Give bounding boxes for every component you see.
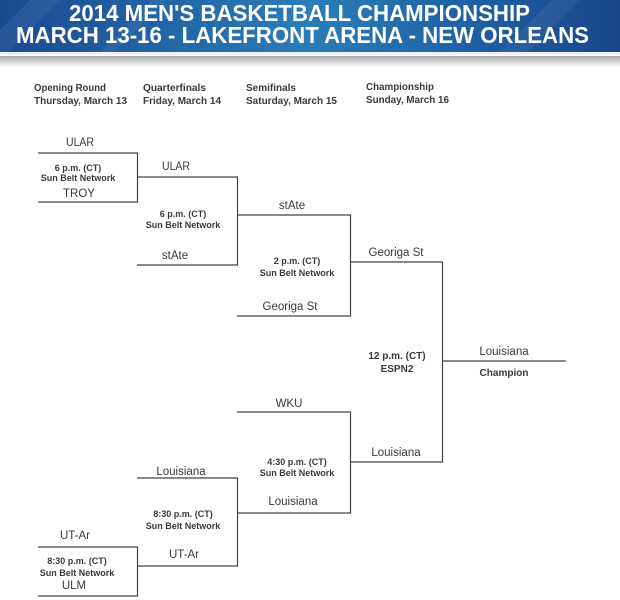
opening game 1: TROY — [63, 188, 95, 200]
title: MARCH 13-16 - LAKEFRONT ARENA - NEW ORLEANS — [16, 22, 589, 48]
semifinal 1: 2 p.m. (CT) — [274, 256, 320, 266]
opening game 1: 6 p.m. (CT) — [55, 163, 101, 173]
quarterfinal 1 — [146, 161, 221, 262]
semifinal 2 — [260, 398, 335, 508]
round headers: Quarterfinals — [143, 82, 206, 94]
opening game 2: ULM — [62, 580, 86, 592]
opening game 1: Sun Belt Network — [41, 173, 116, 183]
header banner — [0, 0, 620, 67]
semifinal 2: Louisiana — [268, 496, 318, 508]
semifinal 1: Sun Belt Network — [260, 268, 335, 278]
opening game 2 — [40, 530, 115, 592]
opening game 1: ULAR — [66, 137, 94, 149]
quarterfinal 1: 6 p.m. (CT) — [160, 209, 206, 219]
championship game: 12 p.m. (CT) — [368, 351, 426, 362]
semifinal 1: Georiga St — [263, 301, 318, 313]
title: 2014 MEN'S BASKETBALL CHAMPIONSHIP — [69, 0, 530, 26]
round headers: Thursday, March 13 — [34, 95, 127, 107]
quarterfinal 2: UT-Ar — [169, 549, 199, 561]
championship game: Georiga St — [369, 247, 424, 259]
round headers: Friday, March 14 — [143, 95, 221, 107]
champion — [479, 346, 529, 379]
round headers: Opening Round — [34, 82, 106, 94]
bracket lines — [38, 153, 566, 596]
opening game 2: Sun Belt Network — [40, 568, 115, 578]
semifinal 1: stAte — [279, 200, 305, 212]
opening game 1 — [41, 137, 116, 200]
quarterfinal 2 — [146, 466, 221, 561]
quarterfinal 1: Sun Belt Network — [146, 220, 221, 230]
quarterfinal 2: 8:30 p.m. (CT) — [153, 509, 213, 519]
round headers: Semifinals — [246, 82, 296, 94]
championship game: ESPN2 — [381, 364, 414, 375]
round headers: Saturday, March 15 — [246, 95, 337, 107]
opening game 2: UT-Ar — [60, 530, 90, 542]
champion: Louisiana — [479, 346, 529, 358]
quarterfinal 1: ULAR — [162, 161, 190, 173]
round headers — [34, 81, 449, 107]
semifinal 1 — [260, 200, 335, 313]
championship game — [368, 247, 426, 459]
quarterfinal 2: Sun Belt Network — [146, 521, 221, 531]
quarterfinal 1: stAte — [162, 250, 188, 262]
semifinal 2: 4:30 p.m. (CT) — [267, 457, 327, 467]
round headers: Championship — [366, 81, 434, 93]
round headers: Sunday, March 16 — [366, 94, 449, 106]
champion: Champion — [480, 368, 528, 379]
quarterfinal 2: Louisiana — [156, 466, 206, 478]
opening game 2: 8:30 p.m. (CT) — [47, 556, 107, 566]
semifinal 2: Sun Belt Network — [260, 468, 335, 478]
semifinal 2: WKU — [276, 398, 302, 410]
title — [16, 0, 589, 48]
championship game: Louisiana — [371, 447, 421, 459]
